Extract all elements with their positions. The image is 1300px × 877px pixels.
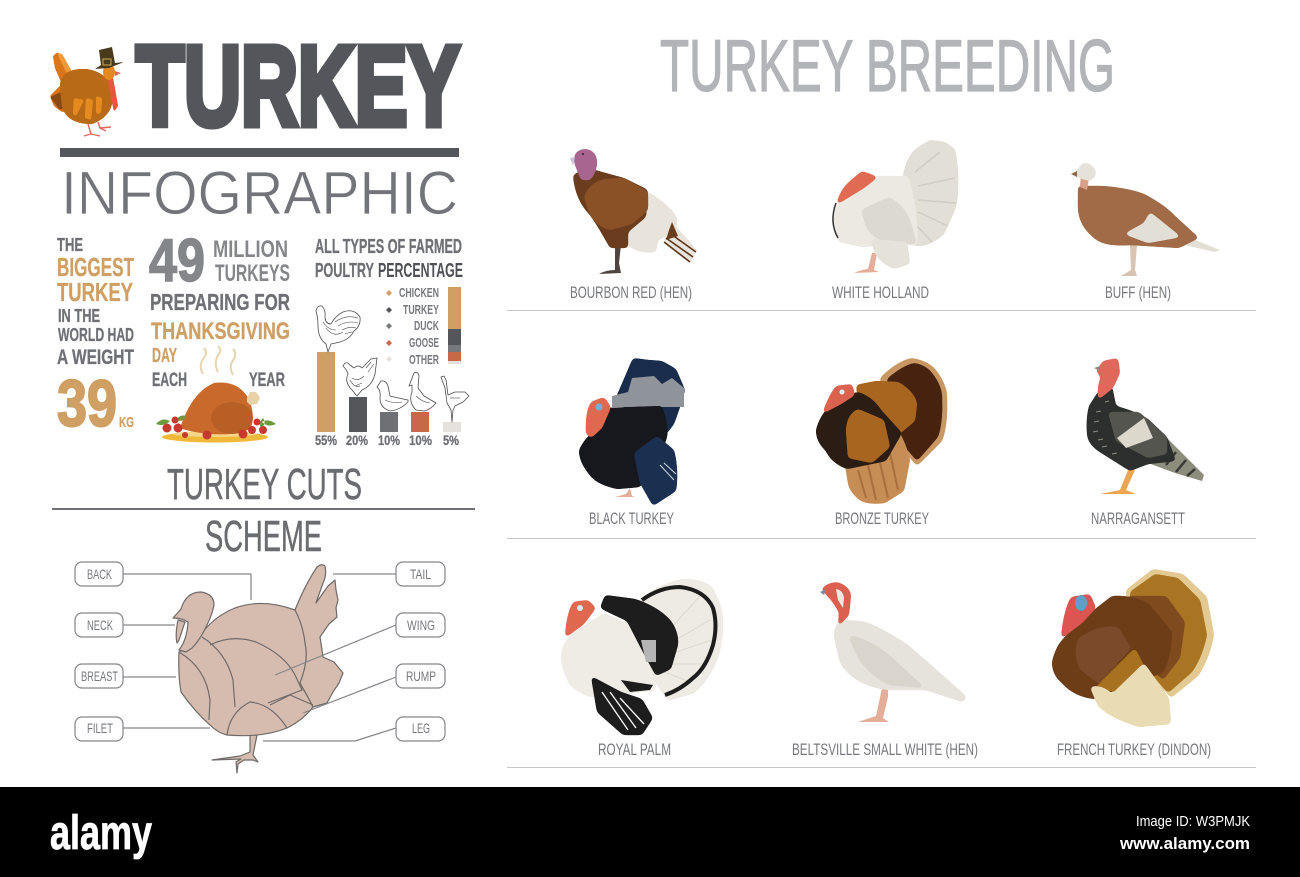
callout: WING: WING — [407, 617, 435, 633]
footer: image id: Image ID: W3PMJK — [1136, 813, 1250, 830]
callout: NECK — [75, 613, 175, 637]
callout: BREAST: BREAST — [81, 668, 118, 684]
text block: biggest turkey: A WEIGHT — [57, 346, 134, 369]
text block: 49 million turkeys: TURKEYS — [215, 260, 290, 287]
callout: RUMP: RUMP — [406, 668, 436, 684]
bar chart: poultry shares — [315, 352, 461, 448]
text block: 49 million turkeys: YEAR — [249, 370, 285, 391]
bar chart: poultry shares: 10% — [409, 432, 432, 448]
callout: LEG: LEG — [412, 720, 430, 736]
label: Beltsville: BELTSVILLE SMALL WHITE (HEN) — [792, 740, 978, 759]
callout: FILET: FILET — [87, 720, 113, 736]
breed: Bourbon Red hen — [570, 149, 697, 274]
cut: main body — [179, 603, 313, 736]
footer band — [0, 787, 1300, 877]
label: Buff hen: BUFF (HEN) — [1105, 283, 1171, 302]
icon: turkey outline — [343, 358, 377, 396]
text block: biggest turkey: BIGGEST — [57, 252, 134, 282]
divider bar — [60, 148, 459, 157]
breed: Royal Palm — [561, 579, 723, 735]
cut: leg foot — [212, 735, 258, 773]
chart heading: farmed poultry percentage: PERCENTAGE — [378, 260, 463, 282]
label: Black Turkey: BLACK TURKEY — [589, 509, 674, 528]
text block: 49 million turkeys: DAY — [152, 345, 177, 367]
row divider — [507, 538, 1256, 539]
title: TURKEY: TURKEY — [136, 23, 460, 149]
bar chart: poultry shares: 55% — [315, 432, 337, 448]
text block: biggest turkey: THE — [57, 235, 83, 255]
heading: TURKEY CUTS: TURKEY CUTS — [167, 460, 362, 509]
icon: goose outline — [409, 372, 436, 411]
breed: Black Turkey — [579, 358, 685, 506]
callout: BACK: BACK — [87, 566, 112, 582]
callout: LEG — [263, 717, 445, 741]
subtitle: INFOGRAPHIC: INFOGRAPHIC — [61, 159, 458, 227]
text block: biggest turkey — [57, 235, 134, 440]
inner cut lines — [179, 637, 313, 735]
text block: 49 million turkeys: PREPARING FOR — [150, 289, 290, 315]
breed: White Holland — [833, 140, 958, 273]
icon: long-necked bird outline — [441, 376, 469, 422]
footer logo: alamy: alamy — [50, 807, 152, 860]
cut: head — [173, 592, 214, 652]
chart heading: farmed poultry percentage: POULTRY — [315, 260, 374, 282]
callout: TAIL: TAIL — [410, 566, 431, 582]
text block: 49 million turkeys: 49 — [149, 227, 205, 294]
chart legend — [386, 286, 439, 367]
chart legend: OTHER — [409, 353, 439, 367]
diagram: turkey cuts scheme — [173, 565, 343, 773]
text block: biggest turkey: KG — [119, 414, 134, 431]
icon: rooster outline — [316, 306, 360, 352]
breed: Buff hen — [1071, 163, 1220, 276]
breed: French Turkey — [1052, 569, 1214, 727]
text block: biggest turkey: TURKEY — [57, 277, 133, 307]
callout: TAIL — [333, 562, 445, 586]
chart heading: farmed poultry percentage: ALL TYPES OF FARMED — [315, 236, 462, 258]
stacked bar — [448, 287, 461, 364]
label: Bronze Turkey: BRONZE TURKEY — [835, 509, 929, 528]
bar chart: poultry shares: 10% — [378, 432, 400, 448]
callout: WING — [275, 613, 445, 675]
cut: neck wattle — [176, 620, 185, 643]
row divider — [507, 310, 1256, 311]
divider under heading — [52, 508, 475, 510]
chart legend: DUCK — [414, 319, 439, 333]
callout: FILET — [75, 717, 210, 741]
icon: pilgrim turkey logo — [50, 47, 124, 136]
row divider — [507, 767, 1256, 768]
breed: Narragansett — [1087, 358, 1204, 494]
text block: biggest turkey: WORLD HAD — [58, 325, 134, 345]
callout: BACK — [75, 562, 251, 600]
chart legend: CHICKEN — [399, 286, 439, 300]
label: Royal Palm: ROYAL PALM — [598, 740, 671, 759]
text block: biggest turkey: IN THE — [58, 306, 100, 326]
footer: website: www.alamy.com — [1119, 834, 1250, 853]
text block: 49 million turkeys: EACH — [152, 370, 187, 391]
chart legend: GOOSE — [409, 336, 439, 350]
bar chart: poultry shares: 5% — [443, 432, 459, 448]
chart legend: TURKEY — [403, 303, 439, 317]
callout: NECK: NECK — [87, 617, 113, 633]
callout: RUMP — [303, 664, 445, 713]
icon: roast turkey on plate — [156, 346, 276, 442]
text block: 49 million turkeys — [149, 227, 290, 391]
label: Bourbon Red: BOURBON RED (HEN) — [570, 283, 692, 302]
label: Narragansett: NARRAGANSETT — [1091, 509, 1185, 528]
icon: duck outline — [377, 381, 408, 411]
bar chart: poultry shares: 20% — [346, 432, 368, 448]
callout: BREAST — [75, 664, 176, 688]
chart heading: farmed poultry percentage — [315, 236, 463, 282]
breed: Bronze Turkey — [816, 358, 947, 504]
label: White Holland: WHITE HOLLAND — [832, 283, 929, 302]
text block: biggest turkey: 39 — [57, 366, 117, 440]
breed: Beltsville Small White hen — [820, 582, 967, 722]
heading: SCHEME: SCHEME — [205, 512, 322, 561]
text block: 49 million turkeys: THANKSGIVING — [151, 318, 290, 345]
text block: 49 million turkeys: MILLION — [213, 236, 288, 263]
cut: tail — [295, 565, 343, 707]
label: French Turkey: FRENCH TURKEY (DINDON) — [1057, 740, 1211, 759]
